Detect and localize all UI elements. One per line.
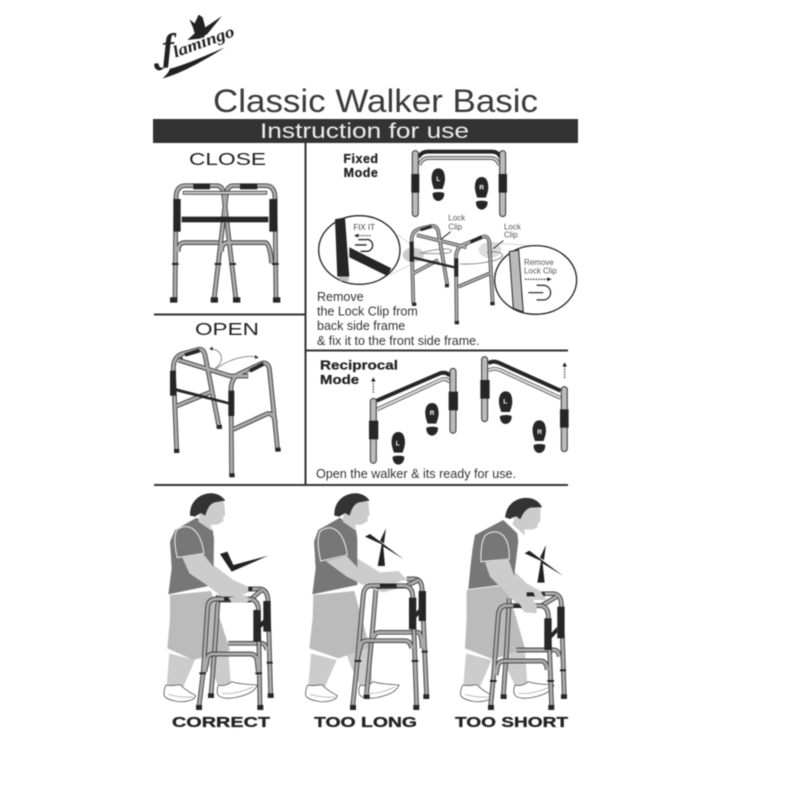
text: remove lock clip instructions: & fix it to the front side frame. [317, 334, 480, 348]
illustration: fixed mode top view [411, 151, 507, 217]
label: too long: TOO LONG [314, 715, 417, 731]
callout: remove lock clip: Lock Clip [524, 266, 557, 275]
illustration: fixed mode top view: L [436, 176, 440, 183]
logo swoosh [163, 47, 225, 78]
heading: reciprocal mode: Mode [320, 373, 359, 387]
icon: cross mark [365, 528, 404, 566]
illustration: lock clip walker [390, 214, 543, 324]
illustration: reciprocal right step [480, 357, 569, 453]
heading bar: instruction for use: Instruction for use [260, 120, 469, 143]
panel: walker height guide [164, 493, 568, 731]
heading: reciprocal mode: Reciprocal [320, 358, 398, 372]
heading: open: OPEN [195, 319, 259, 339]
logo: flamingo [154, 15, 237, 78]
figure: too short [460, 495, 567, 710]
panel: close [170, 149, 280, 303]
callout: remove lock clip: Remove [524, 258, 554, 267]
illustration: reciprocal left step: R [430, 410, 435, 417]
text: remove lock clip instructions: back side frame [317, 319, 405, 333]
illustration: reciprocal left step [369, 368, 458, 465]
illustration: reciprocal left step: L [396, 440, 400, 447]
panel: open [170, 319, 281, 477]
icon: cross mark [525, 545, 563, 583]
arrows: opening direction [179, 347, 259, 370]
figure: correct [164, 493, 274, 710]
icon: check mark [220, 552, 268, 572]
label: correct: CORRECT [172, 715, 270, 731]
logo lettering: f [160, 27, 179, 69]
logo: flamingo: lamingo [170, 22, 237, 61]
callout: fix it: FIX IT [353, 223, 375, 232]
panel: reciprocal mode [316, 357, 569, 481]
label: too short: TOO SHORT [455, 715, 568, 731]
illustration: fixed mode top view: R [479, 185, 484, 192]
icon: flamingo bird [187, 15, 222, 40]
label: lock clip right: Clip [504, 231, 518, 240]
panel: fixed mode [317, 151, 577, 348]
label: lock clip right: Lock [504, 222, 521, 231]
heading bar: instruction for use [153, 119, 578, 143]
title: Classic Walker Basic [213, 83, 538, 119]
text: remove lock clip instructions: Remove [317, 290, 364, 304]
illustration: closed walker [170, 184, 280, 303]
illustration: opened walker [170, 347, 281, 477]
callout: remove lock clip [495, 246, 577, 314]
illustration: reciprocal right step: L [503, 399, 507, 406]
heading: fixed mode: Fixed [343, 152, 379, 166]
heading: fixed mode: Mode [344, 166, 378, 180]
illustration: reciprocal right step: R [537, 429, 542, 436]
text: open the walker: Open the walker & its ready for use. [316, 467, 516, 481]
label: lock clip: Clip [448, 222, 463, 231]
text: remove lock clip instructions: the Lock Clip from [317, 304, 418, 318]
callout: fix it [319, 216, 400, 284]
heading: close: CLOSE [189, 149, 266, 169]
figure: too long [305, 493, 429, 710]
label: lock clip: Lock [448, 214, 465, 223]
